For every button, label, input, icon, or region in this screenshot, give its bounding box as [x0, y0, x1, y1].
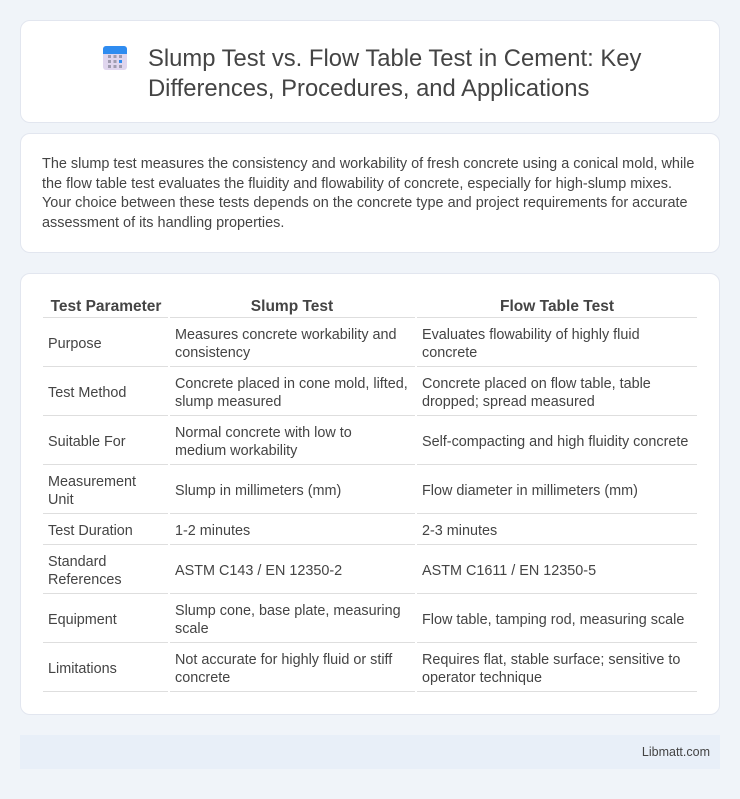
table header	[50, 298, 614, 315]
row: Purpose: Measures concrete workability and	[175, 327, 397, 343]
row: Test Duration	[48, 523, 497, 539]
icon: calendar	[103, 46, 127, 70]
row: Test Method: Concrete placed on flow table, table	[422, 376, 651, 392]
title	[148, 45, 642, 102]
row: Purpose: concrete	[422, 345, 477, 361]
row: Limitations: concrete	[175, 670, 230, 686]
table header: Flow Table Test	[500, 298, 614, 315]
title: Slump Test vs. Flow Table Test in Cement: Key	[148, 45, 641, 72]
row: Standard References: References	[48, 572, 122, 588]
row: Suitable For: Suitable For	[48, 434, 126, 450]
intro text: the flow table test evaluates the fluidity and flowability of concrete, especially for high-slump mixes.	[42, 176, 672, 192]
row: Purpose	[48, 327, 640, 361]
row: Equipment: Flow table, tamping rod, measuring scale	[422, 612, 684, 628]
row: Test Duration: 2-3 minutes	[422, 523, 497, 539]
row: Measurement Unit: Measurement	[48, 474, 136, 490]
row: Equipment: Equipment	[48, 612, 117, 628]
panel: comparison table	[20, 273, 720, 715]
intro text: Your choice between these tests depends on the concrete type and project requirements for accurate	[42, 195, 688, 211]
row: Test Method: dropped; spread measured	[422, 394, 595, 410]
footer bar	[20, 735, 720, 769]
table header: Test Parameter	[51, 298, 161, 315]
row: Limitations: Requires flat, stable surface; sensitive to	[422, 652, 680, 668]
table header: Slump Test	[251, 298, 333, 315]
row: Purpose: consistency	[175, 345, 250, 361]
header card	[20, 20, 720, 123]
title: Differences, Procedures, and Applications	[148, 74, 589, 102]
row: Test Method: Concrete placed in cone mold, lifted,	[175, 376, 408, 392]
intro text: assessment of its handling properties.	[42, 214, 284, 230]
row: Equipment: Slump cone, base plate, measuring	[175, 603, 401, 619]
row: Standard References	[48, 554, 596, 588]
row: Suitable For	[48, 425, 688, 459]
row: Test Method	[48, 376, 651, 410]
row: Measurement Unit: Flow diameter in millimeters (mm)	[422, 483, 638, 499]
row: Test Duration: Test Duration	[48, 523, 133, 539]
row: Measurement Unit: Unit	[48, 492, 74, 508]
row: Limitations: Limitations	[48, 661, 117, 677]
intro card	[20, 133, 720, 253]
row: Limitations: Not accurate for highly fluid or stiff	[175, 652, 392, 668]
row: Measurement Unit	[48, 474, 638, 508]
row: Equipment	[48, 603, 684, 637]
row: Standard References: Standard	[48, 554, 106, 570]
row: Test Method: Test Method	[48, 385, 126, 401]
row: Test Method: slump measured	[175, 394, 281, 410]
row: Suitable For: Normal concrete with low to	[175, 425, 352, 441]
row: Purpose: Evaluates flowability of highly fluid	[422, 327, 640, 343]
row: Equipment: scale	[175, 621, 209, 637]
row: Test Duration: 1-2 minutes	[175, 523, 250, 539]
row: Limitations: operator technique	[422, 670, 542, 686]
row: Standard References: ASTM C143 / EN 12350-2	[175, 563, 342, 579]
row: Suitable For: Self-compacting and high fluidity concrete	[422, 434, 688, 450]
row: Purpose: Purpose	[48, 336, 102, 352]
intro text: The slump test measures the consistency and workability of fresh concrete using a conical mold, while	[42, 156, 694, 172]
row: Standard References: ASTM C1611 / EN 12350-5	[422, 563, 596, 579]
row: Limitations	[48, 652, 680, 686]
row: Suitable For: medium workability	[175, 443, 297, 459]
intro text	[42, 156, 694, 230]
row: Measurement Unit: Slump in millimeters (mm)	[175, 483, 341, 499]
footer text: Libmatt.com	[642, 745, 710, 759]
